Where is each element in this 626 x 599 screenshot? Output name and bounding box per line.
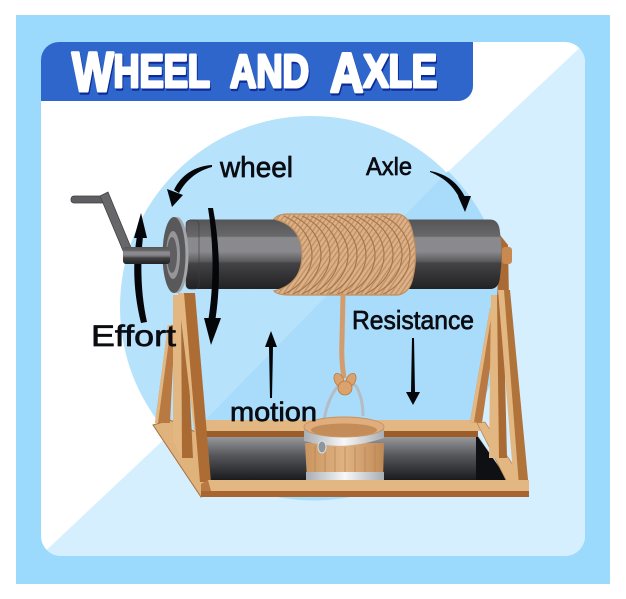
- right inner leg: [497, 295, 507, 458]
- label: wheel: wheel: [219, 152, 293, 184]
- handle rivet: [318, 441, 326, 453]
- rope knot: [332, 372, 358, 395]
- wheel rotation arrow: [204, 208, 221, 345]
- arrow: wheel label: [167, 165, 212, 207]
- title text: XLE: [363, 45, 437, 97]
- front beam: [208, 480, 529, 491]
- handle grip: [71, 196, 107, 203]
- axle cylinder: [186, 220, 502, 289]
- collar: [186, 220, 199, 289]
- crank arm: [100, 192, 132, 253]
- back beam: [200, 420, 480, 431]
- inner panel background: [36, 38, 590, 560]
- left front leg: [178, 293, 203, 482]
- label: effort: Effort: [91, 320, 177, 353]
- right rear diagonal leg: [470, 308, 497, 423]
- right front leg: [503, 290, 529, 490]
- pit: [203, 436, 508, 480]
- arrow: axle label: [430, 171, 471, 212]
- left rear diagonal leg: [155, 325, 175, 423]
- title text: [72, 40, 437, 104]
- wooden well base: [153, 235, 529, 497]
- crank handle: [71, 192, 132, 253]
- bucket: [304, 372, 384, 480]
- title banner: [41, 40, 473, 104]
- right side beam: [477, 422, 524, 482]
- wheel disc: [123, 217, 188, 293]
- title text: A: [330, 41, 363, 104]
- right upper leg behind axle: [497, 235, 509, 300]
- bucket bands: [304, 427, 384, 446]
- resistance arrow: [406, 338, 420, 405]
- label: resistance: Resistance: [352, 305, 474, 335]
- rope coil: [274, 214, 416, 295]
- axle end bolt: [502, 247, 512, 264]
- bucket rim: [304, 417, 384, 437]
- bucket body: [305, 443, 384, 480]
- hanging rope: [342, 295, 344, 378]
- motion arrow: [265, 331, 277, 398]
- title text: AND: [230, 45, 309, 97]
- left side beam: [153, 420, 210, 497]
- title text: HEEL: [114, 45, 210, 97]
- shaft: [123, 247, 170, 264]
- title text: W: [72, 40, 114, 103]
- left inner leg: [173, 295, 182, 458]
- background circle: [120, 116, 506, 500]
- rope windings: [284, 216, 410, 294]
- effort curved arrow: [134, 213, 147, 323]
- bucket handle: [322, 383, 363, 447]
- label: axle: Axle: [366, 153, 412, 181]
- label: motion: motion: [230, 397, 317, 427]
